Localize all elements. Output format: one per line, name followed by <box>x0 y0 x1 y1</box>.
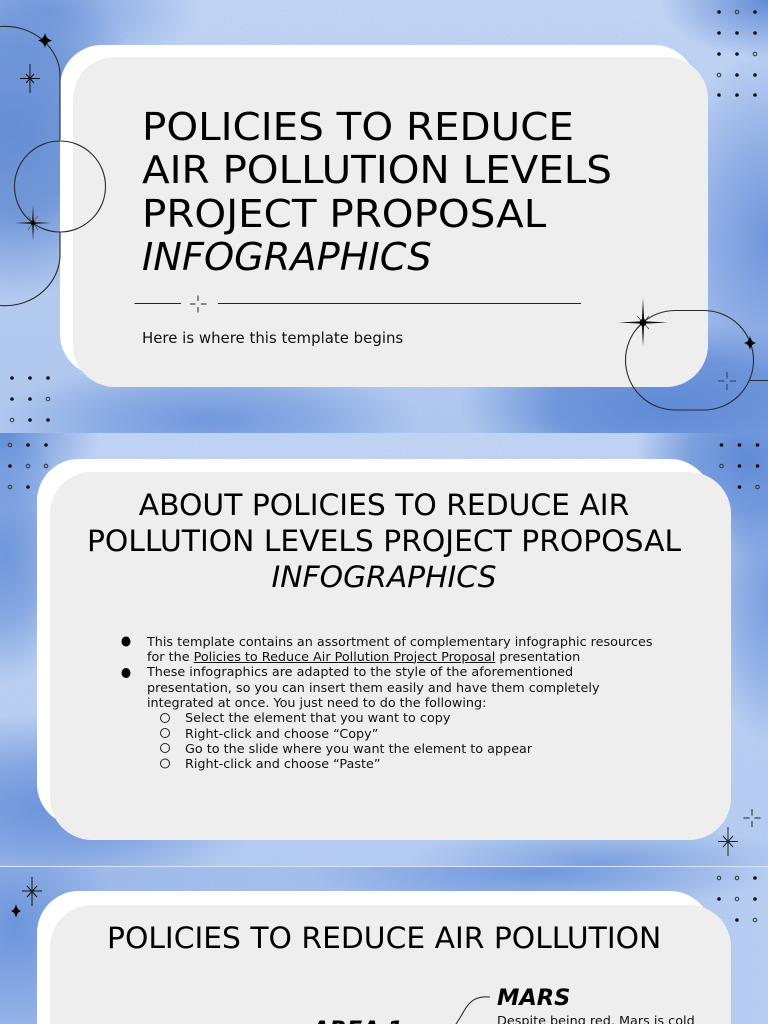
connector: mars curve <box>456 997 490 1024</box>
title: slide 2 <box>87 488 681 595</box>
dots: top left slide 2 <box>8 443 48 489</box>
dots: bottom left slide 1 <box>10 376 50 422</box>
icon: star left thin <box>20 64 40 93</box>
icon: star slide 3 thin <box>22 877 42 906</box>
title: slide 1: PROJECT PROPOSAL <box>142 192 546 236</box>
bullet list: slide 2: for the Policies to Reduce Air Pollution Project Proposal presentation <box>147 650 580 664</box>
icon: right pill outline <box>626 310 768 410</box>
icon: star right large <box>618 298 668 347</box>
bullet list: slide 2: Right-click and choose “Paste” <box>185 756 380 772</box>
icon: left circle outline <box>14 141 106 232</box>
bullet list: slide 2: Right-click and choose “Copy” <box>185 726 378 742</box>
icon: star left large <box>15 205 51 241</box>
dots: top right <box>717 10 757 97</box>
title: slide 2: ABOUT POLICIES TO REDUCE AIR <box>139 488 629 522</box>
slide 2 background <box>0 433 768 866</box>
icon: left pill outline <box>0 26 60 306</box>
bullet list: slide 2: Select the element that you want to copy <box>185 711 450 726</box>
icon: sparkle cross right <box>718 372 736 390</box>
icon: star left top <box>38 33 52 48</box>
dots: top right slide 2 <box>720 443 759 489</box>
title: slide 1: POLICIES TO REDUCE <box>142 104 574 150</box>
panel: slide 1 card <box>73 57 708 387</box>
slide 1 background <box>0 0 768 433</box>
bullet list: slide 2: Go to the slide where you want the element to appear <box>185 742 532 756</box>
heading: mars: MARS <box>497 985 570 1011</box>
title: slide 3: POLICIES TO REDUCE AIR POLLUTION <box>107 921 661 956</box>
bullets: slide 2 <box>122 636 170 768</box>
dots: top right slide 3 <box>717 876 757 922</box>
bullet list: slide 2: This template contains an assortment of complementary infographic resources <box>147 634 653 650</box>
bullet list: slide 2: These infographics are adapted to the style of the aforementioned <box>147 665 573 680</box>
divider: slide 1 <box>134 296 581 312</box>
panel: slide 2 white backing card <box>37 459 712 826</box>
bullet list: slide 2: integrated at once. You just need to do the following: <box>147 696 486 710</box>
title: slide 1 <box>142 104 612 236</box>
panel: slide 2 card <box>50 472 731 840</box>
bullet list: slide 2 <box>146 634 653 772</box>
icon: star slide 3 small <box>11 904 21 918</box>
slide divider <box>0 866 768 867</box>
title: slide 2: INFOGRAPHICS <box>272 560 496 595</box>
panel: slide 1 white backing card <box>60 45 696 376</box>
subtitle: slide 1: Here is where this template begins <box>142 329 403 347</box>
bullet list: slide 2: presentation, so you can insert them easily and have them completely <box>147 680 600 696</box>
title: slide 2: POLLUTION LEVELS PROJECT PROPOSAL <box>87 524 681 559</box>
icon: star slide 2 lower right <box>718 827 738 856</box>
panel: slide 3 card <box>50 905 731 1024</box>
panel: slide 3 white backing card <box>37 891 712 1024</box>
icon: star right small <box>744 336 756 350</box>
slide 3 background <box>0 867 768 1024</box>
title: slide 1 italic line: INFOGRAPHICS <box>142 235 432 280</box>
title: slide 1: AIR POLLUTION LEVELS <box>142 148 612 193</box>
icon: sparkle cross slide 2 <box>744 809 760 827</box>
